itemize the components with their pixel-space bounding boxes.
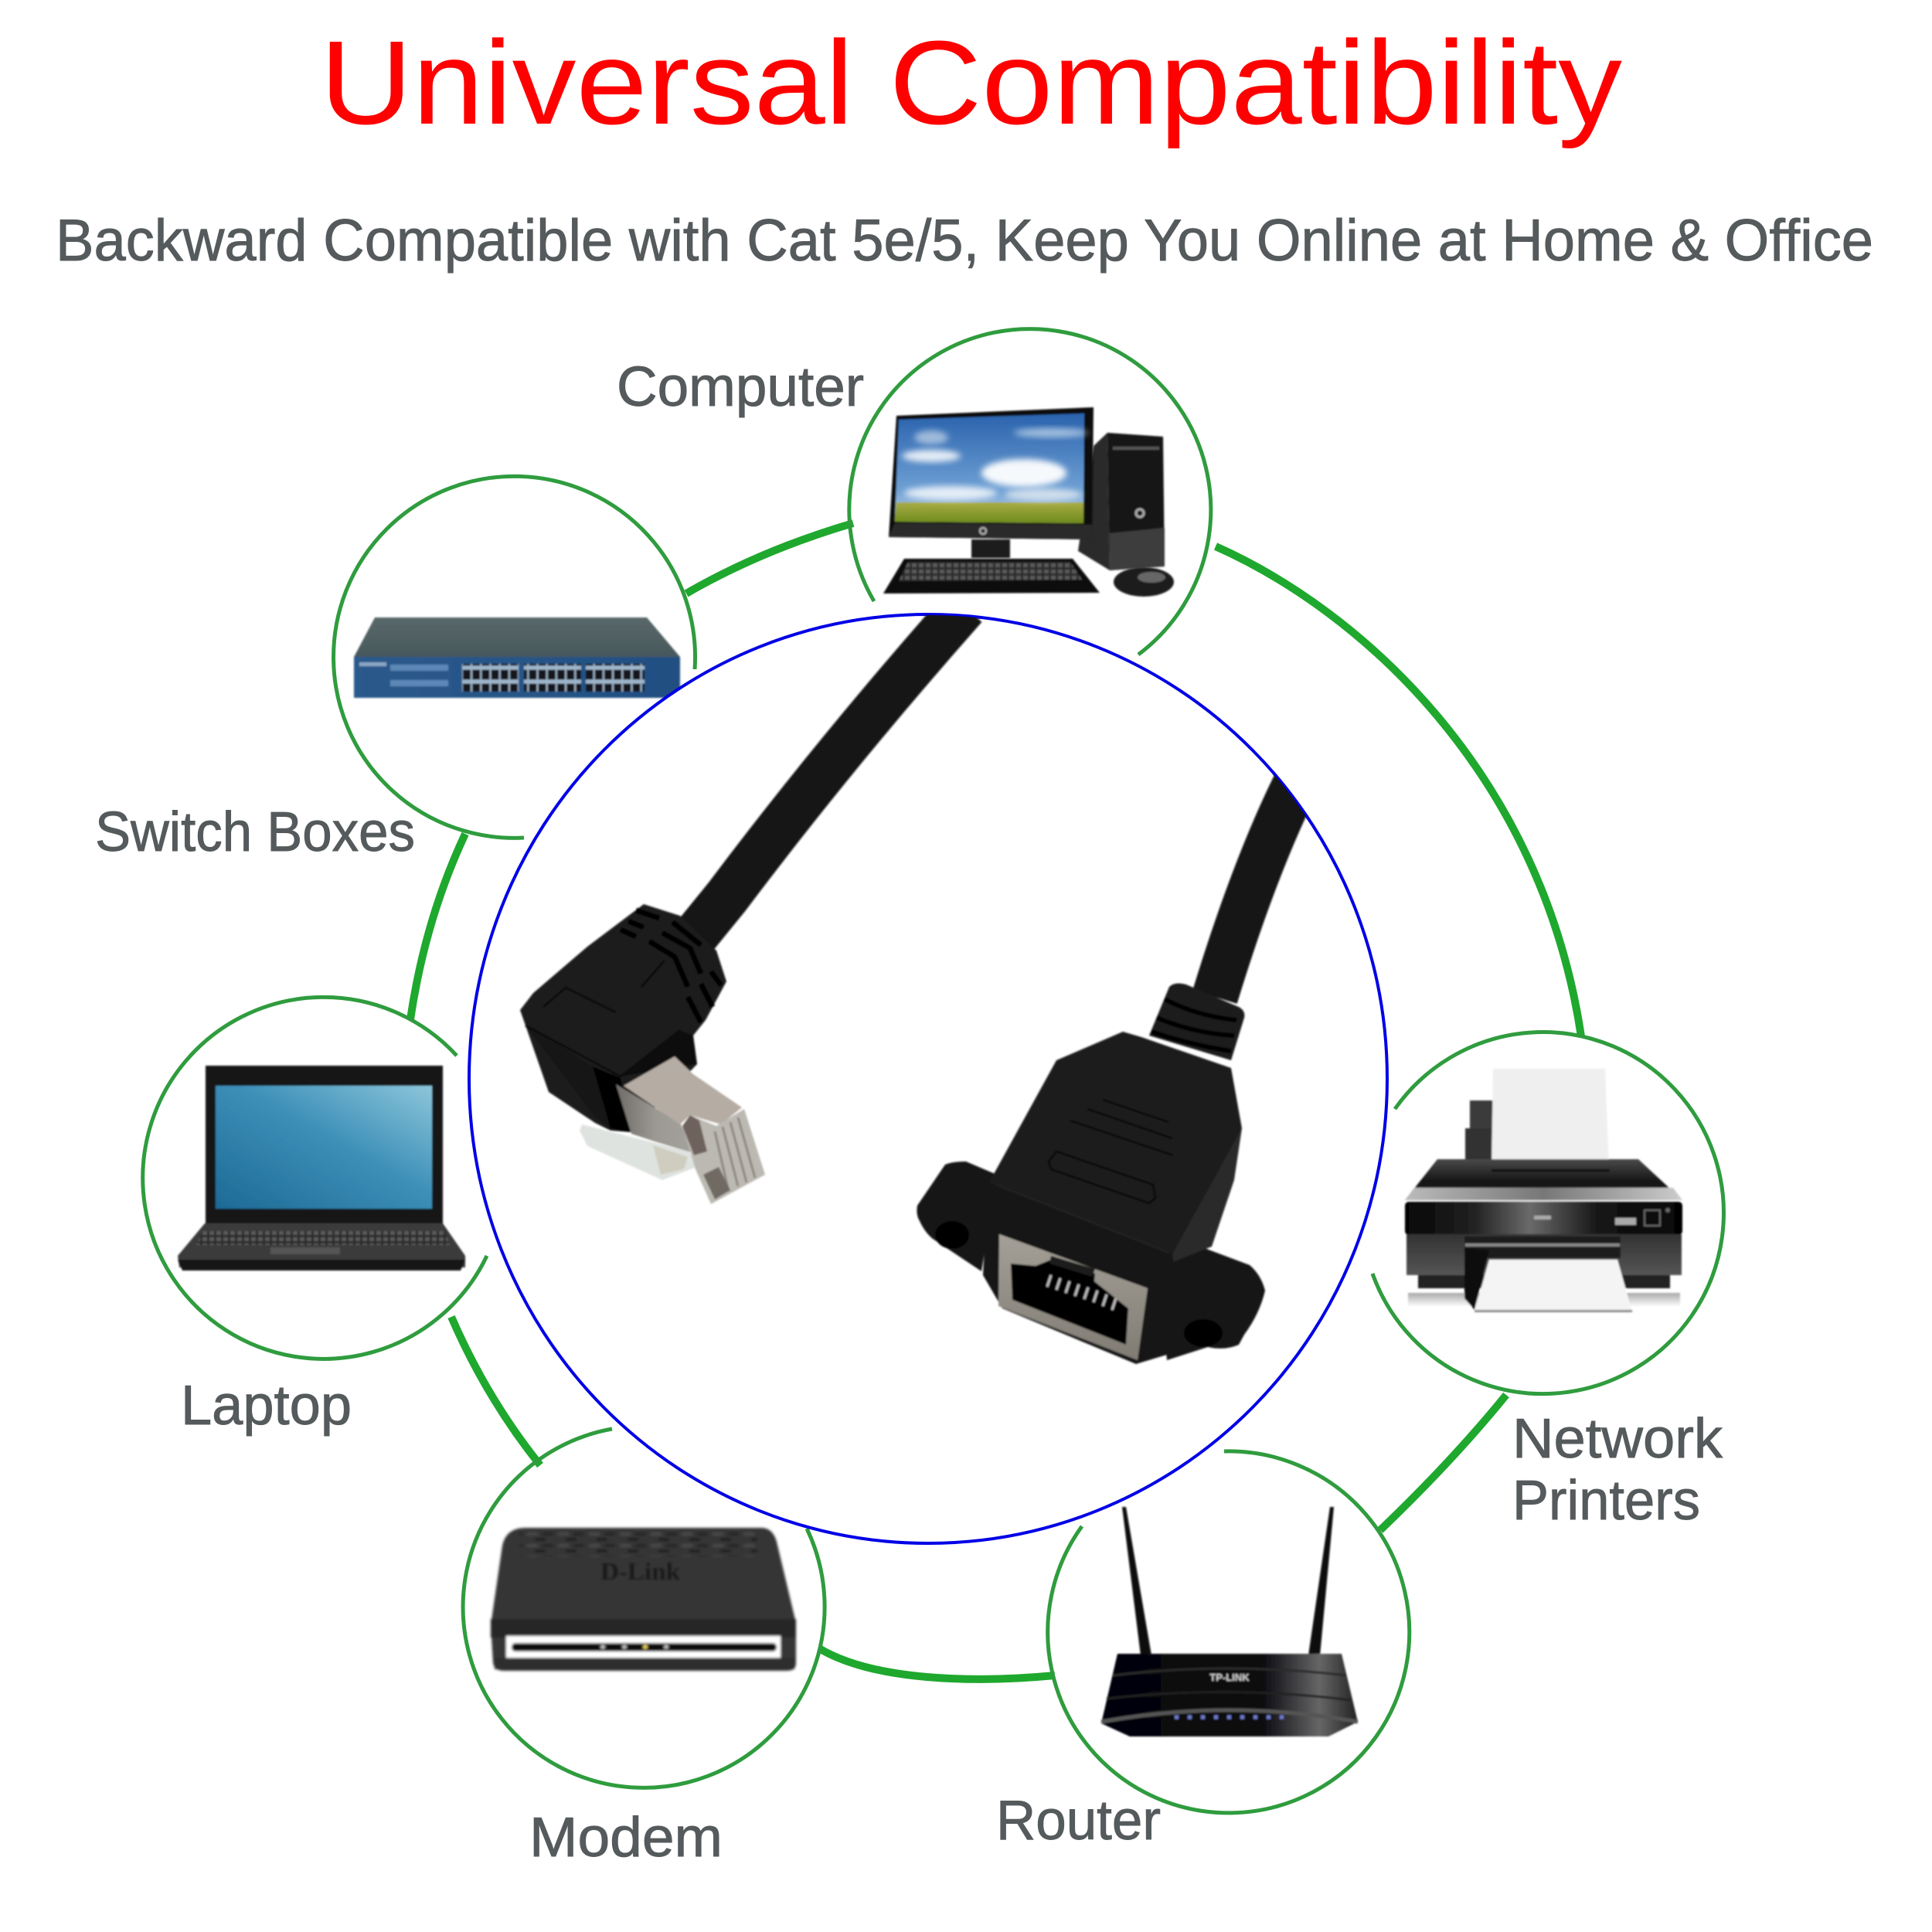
plug metal shield bbox=[616, 1056, 742, 1154]
socket strain relief bbox=[1149, 984, 1244, 1060]
label: modem: Modem bbox=[529, 1807, 723, 1869]
device: modem bbox=[463, 1429, 825, 1787]
device: network printer bbox=[1372, 1032, 1723, 1394]
left ear hole bbox=[935, 1221, 969, 1249]
router circle bbox=[1048, 1451, 1410, 1813]
socket metal jack bbox=[998, 1234, 1148, 1360]
laptop body bbox=[178, 1066, 465, 1270]
computer monitor bbox=[889, 407, 1094, 558]
subtitle: Backward Compatible with Cat 5e/5, Keep You Online at Home & Office bbox=[56, 208, 1873, 274]
computer mouse bbox=[1114, 567, 1174, 597]
printer body bbox=[1405, 1069, 1682, 1312]
modem logo: D-Link bbox=[600, 1557, 680, 1585]
label: network printers bbox=[1512, 1408, 1723, 1532]
central circle bbox=[469, 614, 1387, 1543]
right-angle plug bbox=[520, 607, 964, 1204]
switch circle bbox=[334, 476, 696, 838]
device: computer bbox=[849, 329, 1211, 655]
computer circle bbox=[849, 329, 1211, 655]
computer keyboard bbox=[883, 559, 1100, 594]
label: router: Router bbox=[996, 1790, 1161, 1852]
label: laptop: Laptop bbox=[181, 1375, 352, 1437]
printer circle bbox=[1372, 1032, 1723, 1394]
connecting ring arcs bbox=[410, 523, 1581, 1679]
laptop circle bbox=[143, 997, 487, 1359]
socket cable bbox=[1215, 761, 1308, 997]
plug clear contacts bbox=[682, 1109, 765, 1204]
modem circle bbox=[463, 1429, 825, 1787]
socket left ear bbox=[917, 1162, 997, 1271]
switch body bbox=[354, 617, 680, 698]
device: router bbox=[1048, 1451, 1410, 1813]
panel-mount socket bbox=[917, 761, 1308, 1364]
computer tower bbox=[1078, 433, 1165, 570]
device: laptop bbox=[143, 997, 487, 1359]
router body bbox=[1101, 1507, 1358, 1736]
router logo: TP-LINK bbox=[1209, 1672, 1250, 1683]
socket right ear bbox=[1159, 1247, 1265, 1360]
modem body bbox=[491, 1528, 796, 1671]
central photo: ethernet cable bbox=[520, 607, 1308, 1364]
device labels bbox=[95, 356, 1723, 1869]
socket housing bbox=[983, 1032, 1242, 1364]
plug boot bbox=[520, 904, 726, 1132]
label: computer: Computer bbox=[617, 356, 864, 418]
label: network printers: Printers bbox=[1512, 1470, 1700, 1532]
plug cable bbox=[680, 607, 964, 954]
plug latch bbox=[580, 1124, 703, 1180]
label: network printers: Network bbox=[1512, 1408, 1723, 1470]
right ear hole bbox=[1184, 1319, 1223, 1347]
device: switch box bbox=[334, 476, 696, 838]
label: switch boxes: Switch Boxes bbox=[95, 801, 415, 863]
title: Universal Compatibility bbox=[320, 16, 1622, 149]
